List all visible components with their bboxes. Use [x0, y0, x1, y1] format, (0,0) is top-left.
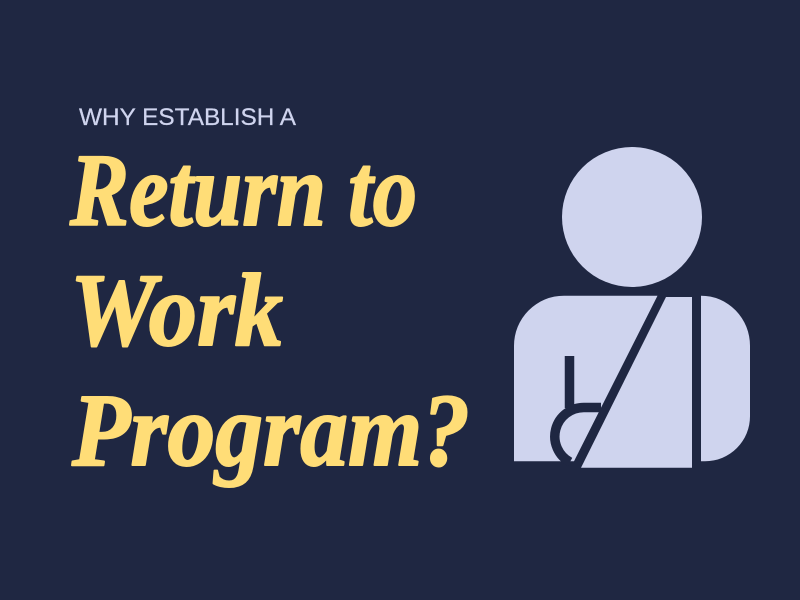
icon torso left side: [514, 296, 658, 461]
title line 3: Program?: [71, 373, 470, 488]
title line 2: Work: [70, 253, 283, 368]
icon sling strap and fabric: [581, 297, 692, 468]
icon forearm outline: [555, 356, 601, 462]
eyebrow heading: why establish a: WHY ESTABLISH A: [79, 104, 297, 131]
icon right arm: [701, 296, 750, 461]
icon: person with arm in sling: [514, 147, 750, 468]
title line 1: Return to: [69, 133, 417, 248]
title: return to work program: [69, 133, 470, 488]
icon head: [562, 147, 702, 287]
